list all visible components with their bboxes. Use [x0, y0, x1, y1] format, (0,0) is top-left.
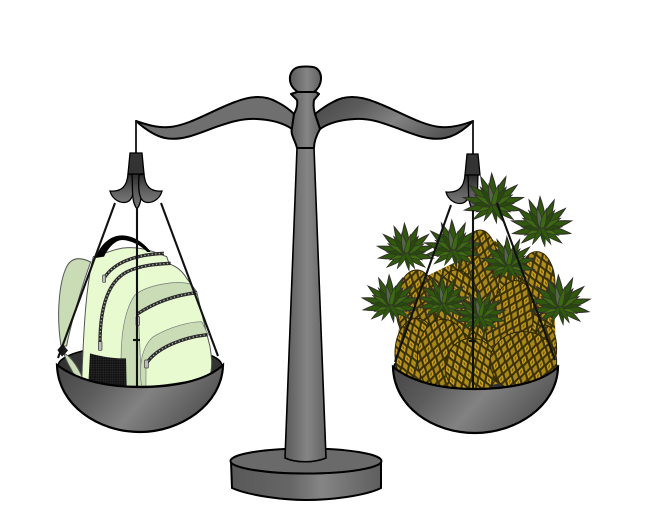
zipper pulls	[98, 275, 148, 368]
stand base	[230, 448, 382, 500]
backpack lower strap	[64, 353, 84, 382]
front pineapple bodies	[417, 319, 557, 395]
central column	[285, 148, 326, 462]
right pan back	[394, 347, 558, 389]
zipper teeth	[100, 253, 207, 364]
right beam arm	[315, 97, 473, 139]
middle pineapple crowns	[362, 275, 420, 323]
back pineapple crowns	[463, 174, 524, 224]
left pan back	[58, 345, 222, 387]
right hanger	[446, 154, 480, 210]
left hanger	[110, 153, 162, 209]
backpack	[57, 235, 212, 388]
balance beam	[136, 66, 473, 148]
backpack body	[82, 248, 212, 388]
pineapples	[362, 174, 591, 395]
middle pineapple bodies	[395, 276, 557, 388]
upper pocket shading	[121, 283, 197, 386]
left pan	[57, 365, 223, 432]
zippers	[100, 253, 207, 364]
right cords	[395, 203, 555, 389]
back pineapple bodies	[396, 230, 555, 343]
left cords	[58, 203, 218, 388]
left beam arm	[136, 97, 294, 139]
mesh side pocket	[88, 353, 127, 387]
top finial ball	[290, 66, 321, 92]
strap buckle	[57, 344, 68, 357]
right pan	[393, 367, 558, 433]
backpack shoulder strap	[59, 259, 91, 346]
lower pocket shading	[140, 322, 208, 386]
pineapple backing mass	[397, 240, 557, 388]
backpack handle	[95, 235, 151, 258]
beam centre neck	[291, 92, 320, 148]
hanging cords to beam	[136, 121, 473, 155]
front pineapple crowns	[417, 277, 469, 319]
